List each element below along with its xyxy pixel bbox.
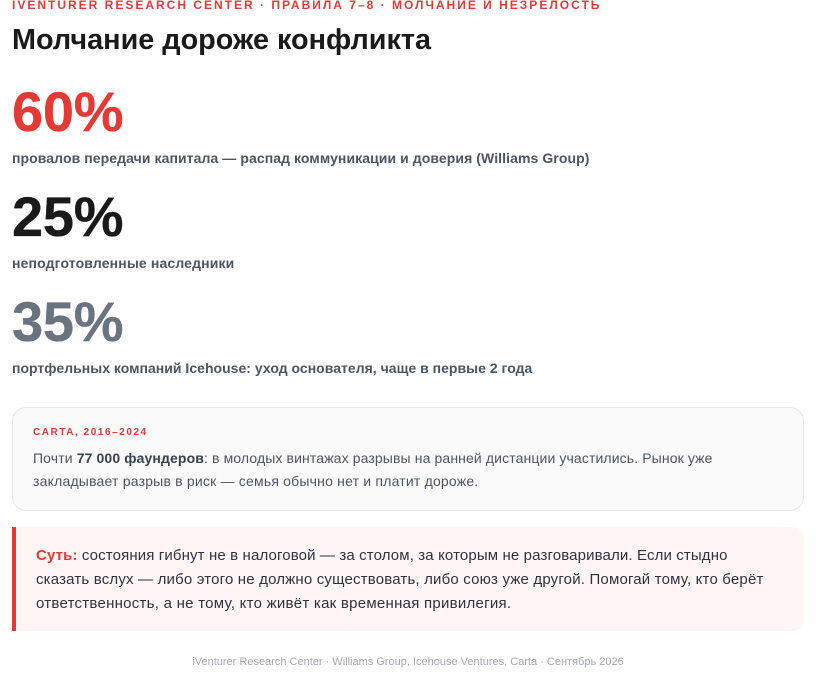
title: Молчание дороже конфликта: [12, 24, 431, 56]
footer: iVenturer Research Center · Williams Group, Icehouse Ventures, Carta · Сентябрь 2026: [192, 656, 624, 668]
stat: 60%: [12, 80, 589, 166]
stat label 25%: неподготовленные наследники: [12, 255, 234, 271]
panel text: [33, 450, 713, 489]
callout text: [36, 547, 764, 612]
stat value 60%: 60%: [12, 80, 123, 143]
callout text: Суть: состояния гибнут не в налоговой — за столом, за которым не разговаривали. Если стыдно: [36, 547, 728, 564]
callout: summary: [12, 527, 804, 631]
callout text: ответственность, а не тому, кто живёт как временная привилегия.: [36, 595, 511, 612]
callout text: сказать вслух — либо этого не должно существовать, либо союз уже другой. Помогай тому, кто берёт: [36, 571, 764, 588]
stat value 35%: 35%: [12, 290, 123, 353]
stat label 60%: провалов передачи капитала — распад коммуникации и доверия (Williams Group): [12, 150, 589, 166]
stat: 25%: [12, 185, 234, 271]
panel text: закладывает разрыв в риск — семья обычно нет и платит дороже.: [33, 473, 478, 489]
stat value 25%: 25%: [12, 185, 123, 248]
panel text: Почти 77 000 фаундеров: в молодых винтажах разрывы на ранней дистанции участились. Рынок уже: [33, 450, 713, 466]
stat: 35%: [12, 290, 532, 376]
stat label 35%: портфельных компаний Icehouse: уход основателя, чаще в первые 2 года: [12, 360, 532, 376]
panel label: CARTA, 2016–2024: [33, 427, 148, 438]
panel: Carta: [12, 407, 804, 511]
